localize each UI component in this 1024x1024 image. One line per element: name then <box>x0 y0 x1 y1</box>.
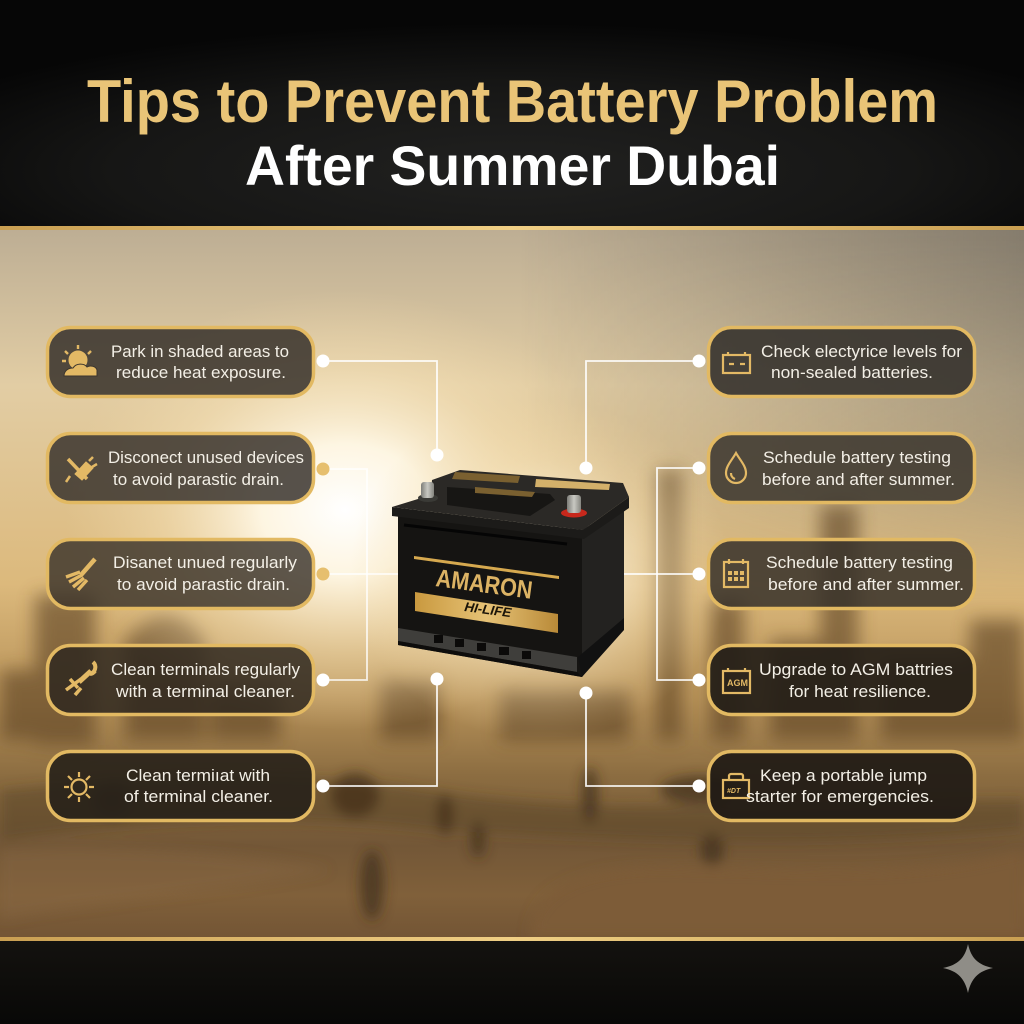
panel: clean terminals: with a terminal cleaner. <box>115 682 295 701</box>
panel: disanet unued: Disanet unued regularly <box>113 553 298 572</box>
panel: park in shade: reduce heat exposure. <box>116 363 286 382</box>
icon: AGM battery: AGM <box>727 678 748 688</box>
battery: HI-LIFE <box>464 599 513 620</box>
battery body <box>398 510 584 677</box>
panel: park in shade <box>48 328 314 396</box>
icon: wrench and plug <box>66 662 95 695</box>
panel: clean terminal with <box>48 752 314 820</box>
header band <box>0 0 1024 227</box>
panel: check electrolyte: Check electyrice levels for <box>761 342 962 361</box>
panel: schedule testing with calendar: Schedule battery testing <box>766 553 953 572</box>
panel: schedule testing with drop: before and after summer. <box>762 470 955 489</box>
icon: calendar <box>724 559 748 587</box>
panel: portable jump starter: starter for emergencies. <box>746 787 934 806</box>
panel: clean terminal with: of terminal cleaner. <box>124 787 273 806</box>
panel: schedule testing with calendar <box>708 540 974 608</box>
panel: disconnect devices: to avoid parastic drain. <box>113 470 284 489</box>
panel: clean terminal with: Clean termiıat with <box>126 766 270 785</box>
icon: battery outline <box>723 352 750 373</box>
panel: schedule testing with drop: Schedule battery testing <box>763 448 951 467</box>
icon: sun <box>64 772 94 802</box>
panel: schedule testing with drop <box>708 434 974 502</box>
terminals <box>418 494 438 502</box>
panel: park in shade: Park in shaded areas to <box>111 342 289 361</box>
panel: check electrolyte: non-sealed batteries. <box>771 363 933 382</box>
icon: sparkle star <box>943 944 993 993</box>
connector dots <box>316 354 706 792</box>
footer band <box>0 940 1024 1024</box>
gold stripe <box>414 556 559 579</box>
lid ridge <box>404 525 567 544</box>
panel: schedule testing with calendar: before and after summer. <box>768 575 964 594</box>
panel: portable jump starter <box>708 752 974 820</box>
icon: crossed plug <box>66 457 97 482</box>
title: After Summer Dubai <box>245 134 780 197</box>
panel: clean terminals <box>48 646 314 714</box>
panel: upgrade to AGM: for heat resilience. <box>789 682 931 701</box>
base strip <box>398 628 577 672</box>
icon: AGM battery <box>723 668 750 693</box>
panel: disanet unued: to avoid parastic drain. <box>117 575 290 594</box>
panel: disconnect devices: Disconect unused devices <box>108 448 304 467</box>
battery lid <box>392 470 629 530</box>
panel: upgrade to AGM: Upgrade to AGM battries <box>759 660 953 679</box>
icon: brush <box>66 559 95 590</box>
icon: jump starter case: #DT <box>727 788 741 795</box>
panel: disanet unued <box>48 540 314 608</box>
title: Tips to Prevent Battery Problem <box>87 68 938 135</box>
panel: check electrolyte <box>708 328 974 396</box>
panel: clean terminals: Clean terminals regularly <box>111 660 300 679</box>
icon: jump starter case <box>723 774 749 798</box>
icon: sun and cloud <box>62 345 97 376</box>
brand label: AMARON <box>434 564 534 605</box>
connector lines <box>323 361 699 786</box>
hi-life band <box>415 592 558 633</box>
panel: portable jump starter: Keep a portable jump <box>760 766 927 785</box>
background: blurred Dubai skyline at sunset <box>0 230 1024 938</box>
panel: disconnect devices <box>48 434 314 502</box>
title <box>87 68 938 197</box>
icon: water drop <box>726 453 746 483</box>
panel: upgrade to AGM <box>708 646 974 714</box>
battery <box>392 470 629 677</box>
